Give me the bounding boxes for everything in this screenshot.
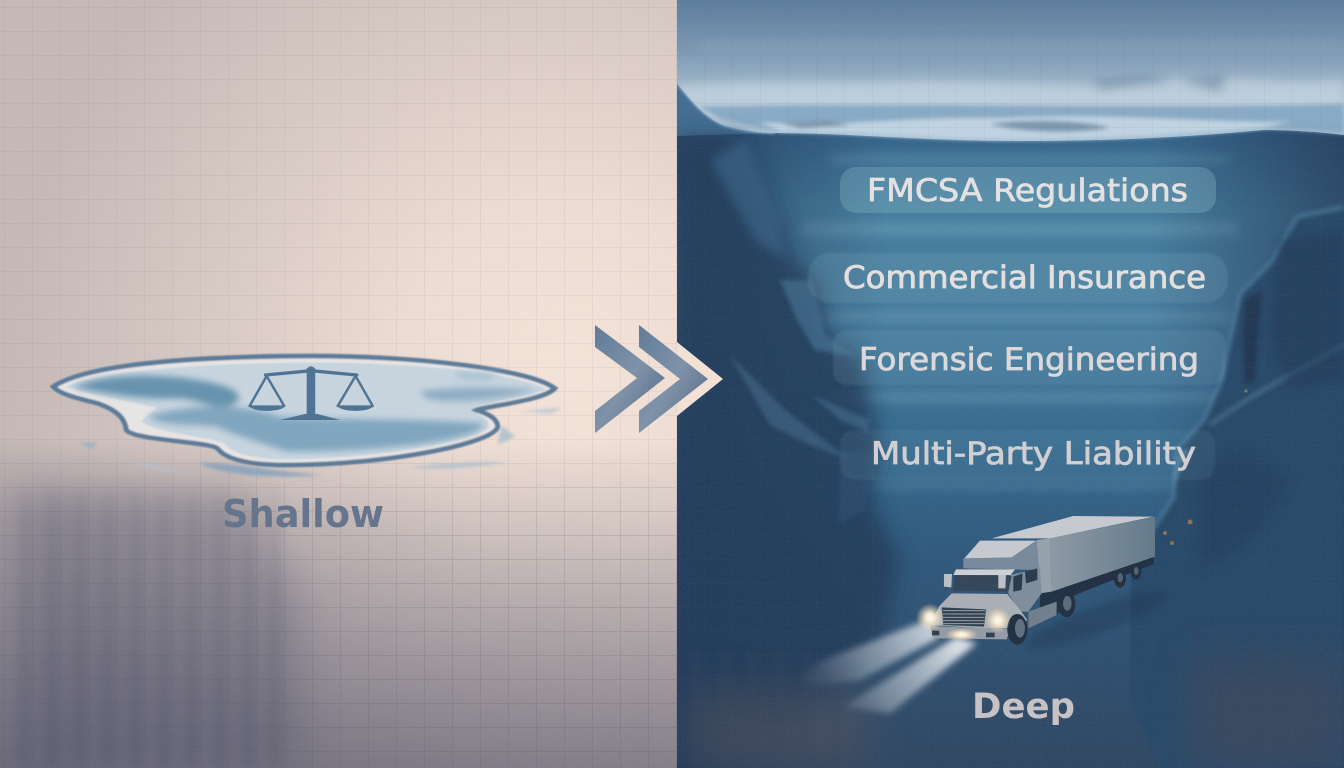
pill: Forensic Engineering <box>833 330 1226 385</box>
water light bands <box>800 155 1240 488</box>
headlights <box>916 603 1011 641</box>
sky and water surface <box>677 0 1344 141</box>
arrow: double chevron <box>595 325 723 433</box>
pill: Commercial Insurance: Commercial Insurance <box>843 260 1206 296</box>
pill: Multi-Party Liability: Multi-Party Liability <box>871 436 1196 472</box>
panel: shallow <box>0 0 677 768</box>
headlight beams <box>783 618 977 713</box>
left cliff <box>677 137 900 760</box>
label: shallow: Shallow <box>222 492 384 536</box>
icon: scales of justice <box>248 366 374 420</box>
label: deep: Deep <box>972 687 1075 727</box>
truck <box>783 516 1170 713</box>
pill: Forensic Engineering: Forensic Engineering <box>859 342 1199 378</box>
bottom stripes <box>690 620 1344 768</box>
panel: deep <box>677 0 1344 768</box>
pill: FMCSA Regulations: FMCSA Regulations <box>867 173 1188 209</box>
icon: puddle with scales <box>53 356 562 476</box>
pill: Multi-Party Liability <box>840 430 1215 480</box>
pill: FMCSA Regulations <box>840 167 1216 213</box>
right cliff <box>1130 207 1344 768</box>
pill: Commercial Insurance <box>808 253 1228 303</box>
